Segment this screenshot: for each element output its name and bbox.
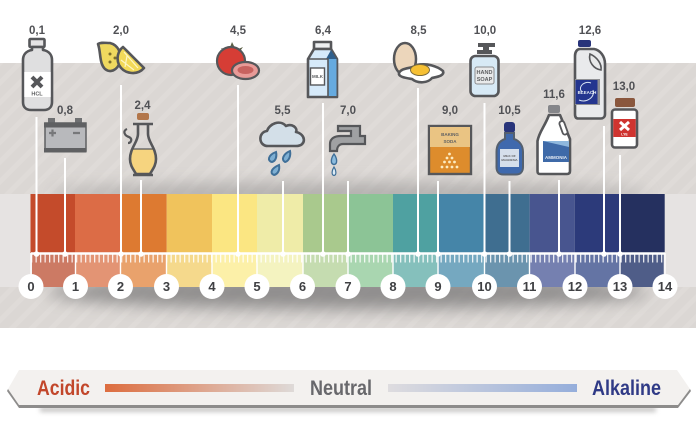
label: Acidic: Acidic (37, 377, 90, 400)
scale number markers: 9 (434, 279, 442, 294)
alkaline gradient bar (388, 384, 577, 392)
label: Neutral: Neutral (310, 377, 372, 400)
icon: HCL bottle (23, 39, 52, 110)
pH value labels: 4,5 (230, 25, 247, 37)
icon: milk of magnesia (496, 122, 523, 174)
scale number markers: 14 (658, 279, 673, 294)
pH value labels: 10,0 (474, 25, 496, 37)
pH value labels: 11,6 (543, 89, 565, 101)
pH value labels: 0,1 (29, 25, 46, 37)
lower tinted bars (32, 253, 664, 287)
scale number markers: 1 (72, 279, 79, 294)
icon: HCL bottle: HCL (31, 92, 43, 98)
scale number markers: 8 (389, 279, 397, 294)
pointer lines (36, 85, 620, 254)
scale number markers: 10 (477, 279, 492, 294)
background band (0, 63, 696, 328)
pH value labels: 6,4 (315, 25, 332, 37)
icon: tomato (217, 42, 259, 79)
icon: bleach bottle (575, 40, 605, 118)
pH value labels: 2,0 (113, 25, 129, 37)
icon: ammonia bottle: AMMONIA (545, 155, 568, 160)
scale number markers: 7 (344, 279, 352, 294)
icon: milk of magnesia: MAGNESIA (501, 158, 518, 162)
icon: milk of magnesia: MILK OF (503, 154, 516, 158)
scale number markers (18, 274, 678, 299)
pH value labels: 5,5 (274, 105, 291, 117)
icon: hand soap (470, 43, 498, 96)
icon: baking soda box (429, 126, 471, 174)
icon: rain cloud (260, 123, 304, 175)
scale number markers: 5 (253, 279, 261, 294)
icon: baking soda box: SODA (443, 139, 457, 144)
pH value labels: 10,5 (498, 105, 521, 117)
icon: vinegar jug (124, 113, 156, 175)
pH value labels: 7,0 (340, 105, 356, 117)
pH value labels: 8,5 (410, 25, 427, 37)
scale number markers: 4 (208, 279, 216, 294)
icon: milk carton: MILK (312, 74, 324, 79)
pH value labels: 0,8 (57, 105, 74, 117)
icon: ammonia bottle (538, 105, 570, 174)
pH value labels: 12,6 (579, 25, 601, 37)
scale number markers: 6 (299, 279, 306, 294)
scale number markers: 2 (117, 279, 124, 294)
icon: milk carton (308, 42, 337, 97)
icon: hand soap: SOAP (477, 77, 493, 83)
icon: water tap (330, 126, 365, 176)
icon: baking soda box: BAKING (441, 132, 459, 137)
pH value labels: 2,4 (134, 100, 151, 112)
pH value labels: 13,0 (613, 81, 635, 93)
icon: hand soap: HAND (477, 70, 492, 76)
pH colour scale (18, 85, 678, 299)
scale number markers: 0 (27, 279, 35, 294)
label: Alkaline: Alkaline (592, 377, 661, 400)
scale number markers: 13 (613, 279, 627, 294)
scale number markers: 11 (523, 279, 536, 294)
icon: car battery (44, 118, 86, 152)
icon: bleach bottle: BLEACH (578, 90, 596, 95)
icon: lye bottle: LYE (621, 132, 628, 136)
scale number markers: 12 (568, 279, 582, 294)
pH value labels: 9,0 (442, 105, 458, 117)
acidic gradient bar (105, 384, 294, 392)
ruler ticks (31, 252, 665, 255)
icon: lemon (98, 43, 144, 73)
icon: lye bottle (612, 98, 637, 148)
legend banner (7, 370, 691, 412)
scale number markers: 3 (163, 279, 170, 294)
icon: eggs (394, 43, 443, 82)
upper colour bars (30, 194, 665, 253)
pH value labels (29, 25, 635, 117)
